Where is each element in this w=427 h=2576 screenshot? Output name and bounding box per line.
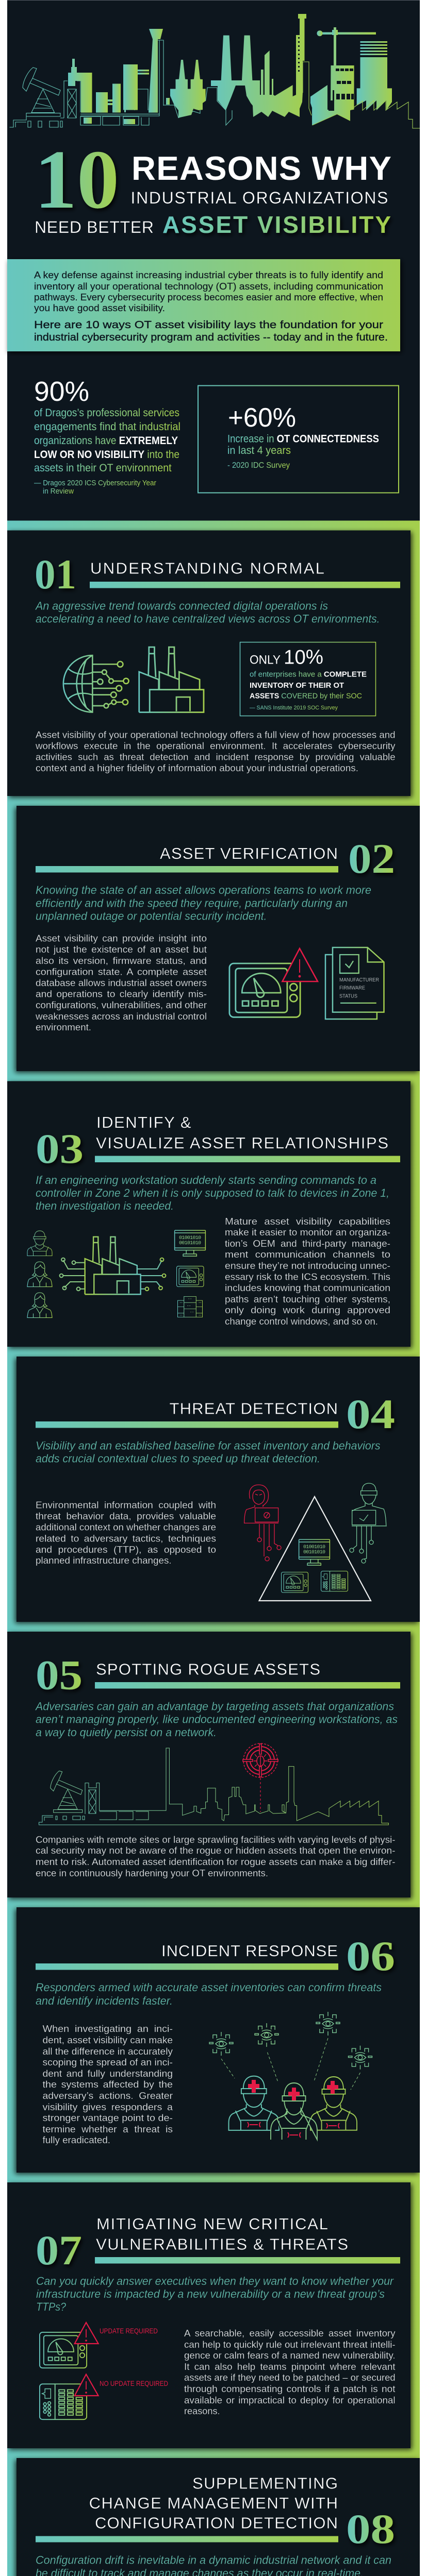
lead (35, 1700, 398, 1739)
icon: monitor with binary: 01001010 (303, 1545, 325, 1550)
lead: a way to quietly persist on a network. (36, 1726, 217, 1739)
body text: database allows industrial asset owners (36, 977, 207, 988)
body text: Environmental information coupled with (36, 1499, 216, 1511)
body text: also its version, firmware status, and (36, 955, 207, 966)
title: asset visibility: ASSET VISIBILITY (162, 211, 391, 238)
body text: available or impractical to deploy for operational (184, 2395, 396, 2405)
icon: small gauge device (177, 1266, 204, 1286)
lead: and identify incidents faster. (36, 1994, 173, 2007)
stat: 90 percent: in Review (43, 487, 74, 496)
lead: unplanned outage or potential security incident. (36, 910, 267, 923)
icon: device no update required (40, 2374, 168, 2419)
lead: Configuration drift is inevitable in a dynamic industrial network and it can (36, 2553, 391, 2566)
body text: stronger vantage point to de- (42, 2112, 173, 2123)
icon: white triangle (259, 1497, 371, 1601)
stat: 90 percent: engagements find that industrial (34, 421, 180, 433)
heading: CONFIGURATION DETECTION (95, 2514, 338, 2532)
lead: Knowing the state of an asset allows operations teams to work more (36, 884, 371, 896)
number 06: 06 (346, 1933, 395, 1979)
body text (42, 2023, 173, 2145)
lead (36, 1439, 381, 1465)
icon: document (325, 947, 384, 1019)
body text: termine whether a threat is (42, 2124, 173, 2134)
title: reasons why: REASONS WHY (132, 149, 391, 187)
number 08: 08 (346, 2505, 395, 2552)
callout: plus 60 percent: - 2020 IDC Survey (227, 461, 290, 470)
body text: fully eradicated. (42, 2134, 110, 2145)
heading bar (95, 2257, 400, 2264)
heading (96, 1117, 388, 1149)
lead: If an engineering workstation suddenly starts sending commands to a (36, 1174, 376, 1187)
number 04: 04 (346, 1391, 395, 1437)
title: big numeral: 10 (35, 133, 119, 226)
body text: Companies with remote sites or large sprawling facilities with varying levels of physi- (36, 1834, 395, 1845)
intro text: industrial cybersecurity program and activities -- today and in the future. (34, 332, 388, 343)
icon: device no update required: NO UPDATE REQUIRED (100, 2379, 168, 2387)
title: industrial organizations: INDUSTRIAL ORGANIZATIONS (131, 189, 388, 207)
stat: 90 percent: 90% (34, 376, 89, 407)
icon: globe circuit (63, 655, 129, 712)
panel: 08 supplementing change management (17, 2458, 420, 2576)
heading bar (36, 1963, 338, 1970)
body text (36, 1499, 216, 1566)
intro text (34, 270, 388, 343)
title (35, 133, 391, 238)
body text: the systems affected by the (42, 2079, 173, 2090)
body text: ment communication channels to (225, 1249, 390, 1260)
body text (225, 1216, 390, 1327)
icon: device update required (40, 2323, 158, 2368)
body text: weaknesses across an industrial control (35, 1011, 207, 1022)
skyline: filled buildings (68, 14, 392, 125)
body text: environment. (36, 1022, 91, 1032)
callout: only 10 percent: ASSETS COVERED by their SOC (250, 692, 362, 701)
number 07: 07 (36, 2227, 82, 2274)
body text: adversary’s actions. Greater (42, 2090, 173, 2101)
lead: Adversaries can gain an advantage by targeting assets that organizations (35, 1700, 394, 1713)
lead (36, 2275, 395, 2313)
number 01: 01 (35, 551, 76, 598)
lead: efficiently and with the speed they require, particularly during an (36, 897, 348, 910)
panel: 03 identify and visualize (7, 1081, 410, 1347)
callout: plus 60 percent: +60% (228, 403, 296, 433)
body text: workflows execute in the operational environment. It accelerates cybersecurity (35, 740, 396, 751)
lead (36, 1174, 389, 1212)
heading: THREAT DETECTION (169, 1400, 338, 1418)
lead: Visibility and an established baseline for asset inventory and behaviors (36, 1439, 381, 1452)
body text (35, 730, 396, 773)
heading: VULNERABILITIES & THREATS (96, 2235, 348, 2253)
lead (36, 2553, 391, 2576)
body text: threat behavior data, provides valuable (36, 1511, 216, 1521)
lead: controller in Zone 2 when it is only supposed to talk to devices in Zone 1, (36, 1187, 389, 1199)
intro text: pathways. Every cybersecurity process becomes easier and more effective, when (34, 292, 383, 302)
icon: monitor with binary: 00101010 (179, 1241, 201, 1246)
body text: tion’s OEM and third-party manage- (225, 1238, 390, 1249)
intro text: inventory all your operational technology (OT) assets, including communication (34, 281, 383, 292)
icon: hacker (244, 1485, 281, 1561)
lead: adds crucial contextual clues to speed up threat detection. (36, 1452, 320, 1465)
icon: response team (229, 2076, 357, 2140)
body text (184, 2328, 396, 2416)
heading: CHANGE MANAGEMENT WITH (89, 2494, 338, 2512)
lead: An aggressive trend towards connected digital operations is (35, 600, 328, 613)
lead (36, 1981, 382, 2007)
intro text: you have good asset visibility. (34, 303, 165, 313)
body text: reasons. (184, 2405, 220, 2416)
icon: bug target (243, 1743, 278, 1812)
panel: intro (7, 259, 400, 351)
body text: dent, asset visibility can make (42, 2035, 173, 2045)
heading: VISUALIZE ASSET RELATIONSHIPS (96, 1134, 388, 1152)
panel: 01 understanding normal (7, 531, 410, 796)
panel: 04 threat detection (17, 1357, 420, 1622)
callout: only 10 percent: of enterprises have a COMPLETE (250, 670, 367, 679)
skyline: pump jack (23, 67, 60, 116)
lead (36, 884, 371, 923)
heading bar (36, 866, 338, 873)
skyline: outline right (303, 62, 420, 128)
body text: assets are if they need to be patched – or secured (184, 2372, 396, 2383)
heading (96, 2215, 348, 2253)
icon: document: FIRMWARE (339, 985, 365, 991)
body text: Asset visibility of your operational technology offers a full view of how processes and (36, 730, 395, 740)
body text: configurations, vulnerabilities, and other (36, 999, 207, 1010)
intro text: Here are 10 ways OT asset visibility lays the foundation for your (34, 319, 383, 331)
body text: and operations to clearly identify mis- (36, 989, 207, 999)
body text: change control windows, and so on. (225, 1316, 378, 1327)
body text: configuration state. A complete asset (36, 967, 207, 977)
body text: all the difference in accurately (42, 2046, 173, 2057)
number 03: 03 (36, 1125, 84, 1172)
heading bar (36, 1421, 338, 1428)
icon: gauge device (229, 963, 300, 1017)
title: need better: NEED BETTER (35, 218, 154, 236)
stat: 90 percent: LOW OR NO VISIBILITY into the (34, 449, 179, 461)
body text: Asset visibility can provide insight into (36, 933, 207, 944)
lead: then investigation is needed. (36, 1199, 174, 1212)
body text (35, 933, 207, 1032)
body text: When investigating an inci- (42, 2023, 173, 2034)
panel: 07 mitigating vulnerabilities (7, 2182, 410, 2448)
heading bar (95, 1156, 400, 1162)
panel: 06 incident response (17, 1907, 420, 2173)
callout: plus 60 percent (198, 385, 399, 493)
heading: SUPPLEMENTING (192, 2475, 338, 2493)
heading: MITIGATING NEW CRITICAL (96, 2215, 328, 2233)
body text: related to adversary tactics, techniques (36, 1533, 216, 1544)
lead: aren’t managing properly, like undocumented engineering workstations, as (36, 1713, 398, 1726)
icon: switch panel (321, 1571, 348, 1591)
number 02: 02 (348, 835, 395, 882)
body text: ment to risk. Automated asset identification for rogue assets can make a big differ- (36, 1856, 395, 1867)
heading (89, 2475, 338, 2532)
icon: engineer with laptop (350, 1483, 387, 1563)
lead: Responders armed with accurate asset inventories can confirm threats (36, 1981, 382, 1994)
callout: only 10 percent: INVENTORY OF THEIR OT (250, 681, 344, 690)
heading bar (36, 2536, 338, 2542)
illustration: skyline outline (39, 1748, 388, 1825)
icon: device update required: UPDATE REQUIRED (100, 2327, 158, 2335)
lead: Can you quickly answer executives when they want to know whether your (36, 2275, 395, 2287)
panel: 05 spotting rogue assets (7, 1632, 410, 1897)
body text: includes knowing that communication (225, 1282, 390, 1293)
skyline: ground outline left (9, 40, 313, 127)
lead (35, 600, 380, 625)
callout: only 10 percent: ONLY (250, 653, 281, 667)
heading bar (90, 582, 400, 588)
callout: plus 60 percent: Increase in OT CONNECTEDNESS (227, 433, 379, 445)
body text: It can also help teams pinpoint where relevant (184, 2361, 396, 2372)
lead: infrastructure is impacted by a new vulnerability or a new threat group’s (36, 2287, 385, 2300)
stat: 90 percent: of Dragos’s professional services (34, 407, 179, 419)
body text: and procedures (TTP), as opposed to (36, 1544, 216, 1555)
body text: paths aren’t touching other systems, (225, 1294, 390, 1304)
body text: can help to quickly rule out irrelevant threat intelli- (184, 2339, 396, 2350)
body text: Mature asset visibility capabilities (225, 1216, 390, 1227)
body text: visibility gives responders a (42, 2102, 173, 2112)
icon: buildings (177, 1296, 203, 1317)
body text: dent and fully understanding (42, 2068, 173, 2079)
icon: target eyes (209, 2012, 372, 2090)
illustration: industrial skyline (9, 14, 420, 128)
number 05: 05 (36, 1652, 83, 1699)
body text: not just the existence of an asset but (36, 944, 207, 955)
icon: gauge device (282, 1572, 308, 1592)
icon: document: STATUS (339, 993, 357, 999)
heading: IDENTIFY & (96, 1113, 191, 1131)
stat: 90 percent: assets in their OT environment (34, 462, 172, 474)
skyline: dark windows (237, 37, 357, 112)
body text: A searchable, easily accessible asset inventory (184, 2328, 396, 2338)
icon: workers (27, 1231, 52, 1318)
body text (36, 1834, 395, 1878)
callout: only 10 percent (240, 642, 375, 716)
body text: ensure they’re not introducing unnec- (225, 1260, 390, 1271)
body text: gence or calm fears of a named new vulnerability. (184, 2350, 396, 2361)
icon: warning triangle (283, 948, 318, 981)
icon: factory (139, 647, 204, 712)
icon: document: MANUFACTURER (339, 977, 379, 983)
intro text: A key defense against increasing industrial cyber threats is to fully identify and (34, 270, 383, 280)
body text: through compensating controls if a patch is not (184, 2383, 396, 2394)
lead: TTPs? (36, 2300, 67, 2313)
lead: accelerating a need to have centralized views across OT environments. (36, 613, 380, 625)
heading bar (95, 1682, 400, 1689)
icon: monitor with binary: 00101010 (303, 1550, 325, 1555)
icon: monitor with binary (299, 1539, 330, 1565)
body text: ence in continuously hardening your OT environments. (36, 1868, 268, 1878)
callout: plus 60 percent: in last 4 years (227, 445, 291, 456)
body text: essary risk to the ICS ecosystem. This (225, 1272, 390, 1282)
icon: monitor with binary (175, 1230, 205, 1256)
heading: ASSET VERIFICATION (160, 844, 338, 862)
stat: 90 percent: organizations have EXTREMELY (34, 435, 178, 447)
callout: only 10 percent: 10% (284, 647, 323, 669)
body text: only doing work during approved (225, 1304, 390, 1315)
heading: UNDERSTANDING NORMAL (90, 560, 324, 578)
icon: monitor with binary: 01001010 (179, 1235, 201, 1241)
icon: factory with circuits (60, 1237, 166, 1294)
stat: 90 percent (34, 376, 180, 496)
callout: only 10 percent: — SANS Institute 2019 SOC Survey (250, 705, 338, 711)
heading: INCIDENT RESPONSE (161, 1942, 338, 1960)
body text: additional context on whether changes are (36, 1522, 216, 1533)
body text: planned infrastructure changes. (36, 1555, 172, 1566)
panel: 02 asset verification (17, 806, 420, 1071)
heading: SPOTTING ROGUE ASSETS (96, 1660, 320, 1679)
body text: activities such as threat detection and incident response by providing valuable (36, 752, 395, 762)
body text: cal security may not be aware of the rogue or hidden assets that open the environ- (36, 1845, 395, 1856)
body text: context and a higher fidelity of information about your industrial operations. (36, 762, 358, 773)
body text: scoping the spread of an inci- (42, 2057, 173, 2067)
body text: make it easier to monitor an organiza- (225, 1227, 390, 1238)
stat: 90 percent: — Dragos 2020 ICS Cybersecurity Year (34, 479, 156, 487)
